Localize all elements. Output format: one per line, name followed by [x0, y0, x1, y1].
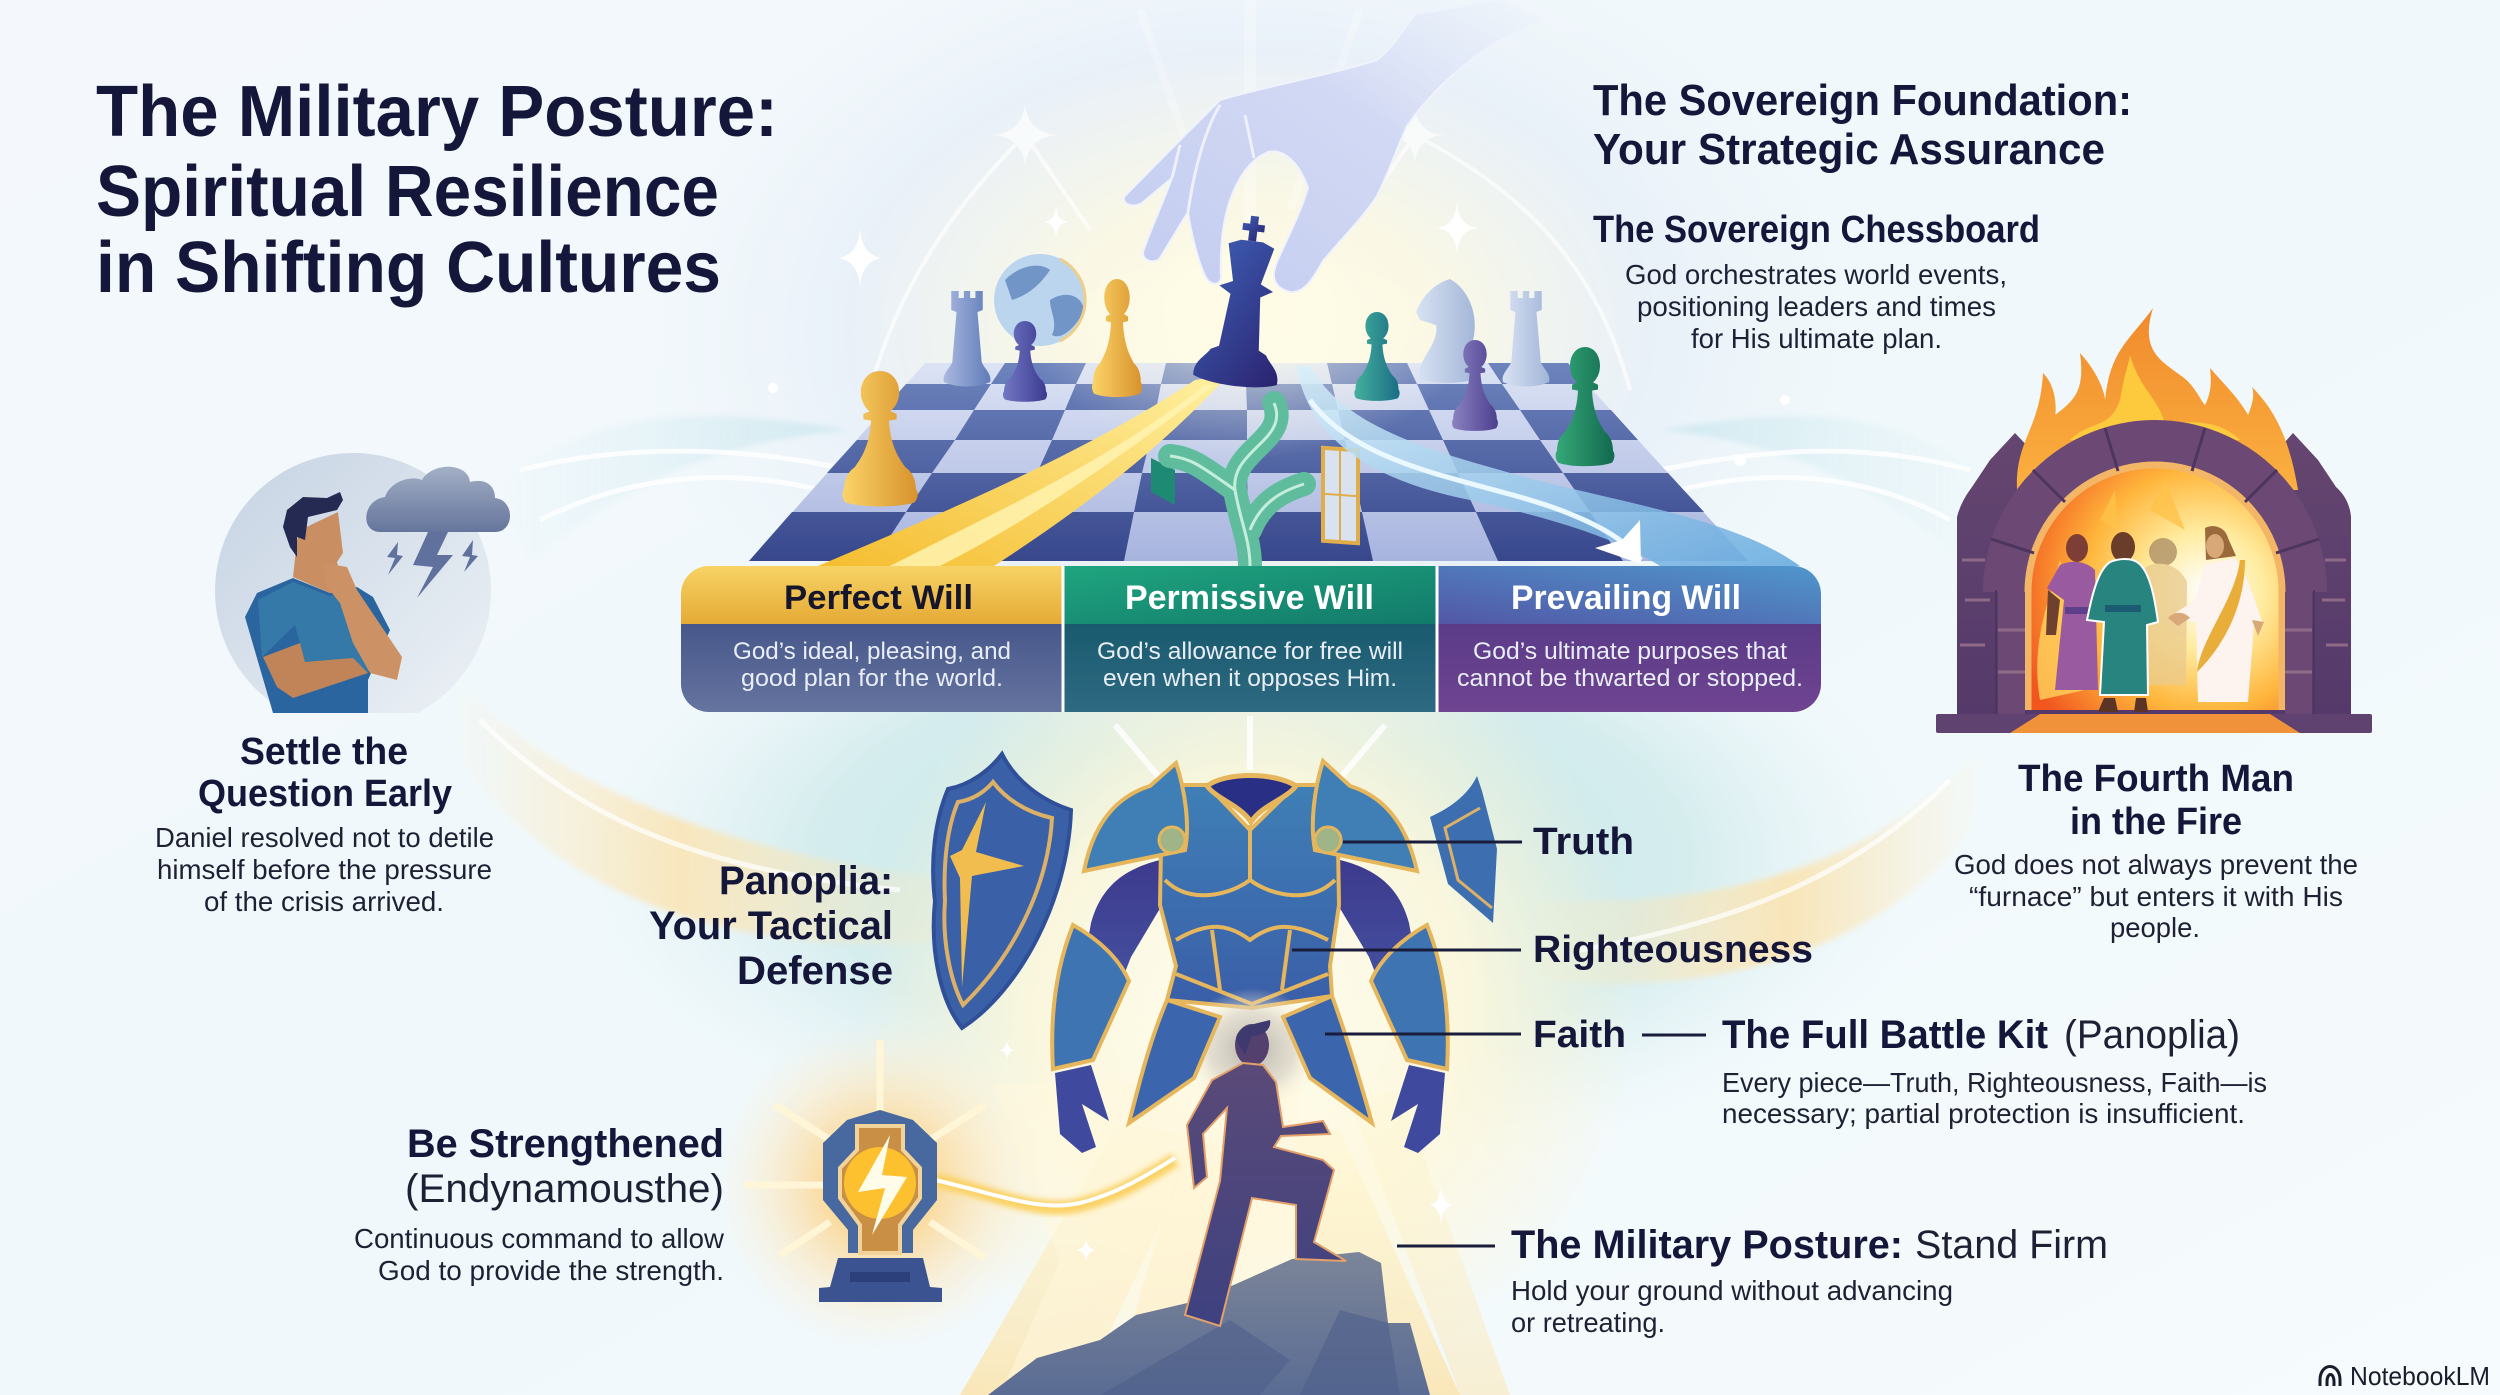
- armor: right bracer: [1371, 925, 1448, 1069]
- title: The Military Posture:: [96, 72, 778, 152]
- armor: glow behind the man: [1182, 988, 1322, 1112]
- armor: breastplate and arms: [1052, 761, 1448, 1153]
- text block: be strengthened: [354, 1122, 725, 1286]
- heading: sovereign foundation: [1593, 76, 2132, 174]
- text block: military posture stand firm: The Military Posture:: [1511, 1223, 1903, 1267]
- icon: rock outcrop: [988, 1252, 1430, 1395]
- cell: prevailing will: cannot be thwarted or stopped.: [1457, 665, 1803, 692]
- text block: full battle kit: The Full Battle Kit: [1722, 1013, 2048, 1057]
- piece: purple pawn: [1003, 321, 1047, 402]
- armor: right tasset: [1283, 996, 1372, 1123]
- title: [96, 72, 778, 308]
- label: faith with leader: Faith: [1533, 1014, 1626, 1056]
- chessboard: [749, 250, 1748, 561]
- text block: settle the question early: [155, 731, 494, 917]
- cell: permissive will: God’s allowance for free will: [1097, 638, 1403, 665]
- figure: radiant fourth man: [2168, 526, 2264, 702]
- cell: permissive will: [1097, 579, 1403, 692]
- text block: sovereign chessboard: for His ultimate plan.: [1691, 323, 1942, 354]
- piece: left rook: [944, 291, 990, 386]
- text block: the fourth man: [1954, 758, 2358, 943]
- icon: standing man silhouette: [1185, 1020, 1346, 1326]
- icon: globe: [994, 254, 1086, 346]
- text block: full battle kit: [1722, 1013, 2267, 1129]
- text block: military posture stand firm: Hold your ground without advancing: [1511, 1275, 1953, 1306]
- armor: left arm: [1087, 860, 1165, 985]
- path: permissive will branching road with doors: [1151, 403, 1358, 566]
- text block: military posture stand firm: [1397, 1223, 2108, 1338]
- text block: settle the question early: himself before the pressure: [157, 854, 492, 885]
- piece: king: [1192, 211, 1297, 391]
- armor: right pauldron: [1313, 761, 1417, 871]
- halo rays and arcs behind the board: [870, 0, 1630, 390]
- armor: right arm: [1335, 860, 1413, 985]
- path: prevailing will blue stream with arrow: [1296, 366, 1800, 566]
- cell: perfect will: [733, 579, 1011, 692]
- icon: left shield: [933, 754, 1071, 1028]
- heading: sovereign foundation: The Sovereign Foundation:: [1593, 76, 2132, 125]
- icon: thinking man with storm cloud: [215, 453, 510, 729]
- text block: full battle kit: (Panoplia): [2064, 1013, 2240, 1057]
- armor: left gauntlet: [1055, 1065, 1109, 1153]
- armor: left pauldron: [1084, 763, 1187, 871]
- sparkles around the board: [768, 202, 1790, 466]
- watermark: notebooklm: NotebookLM: [2350, 1361, 2490, 1391]
- icon: right shield: [1430, 776, 1497, 923]
- cell: perfect will: good plan for the world.: [741, 665, 1003, 692]
- piece: green pawn: [1556, 347, 1614, 466]
- text block: sovereign chessboard: The Sovereign Chessboard: [1593, 209, 2040, 251]
- cell: permissive will: Permissive Will: [1125, 579, 1374, 617]
- path: perfect will golden road: [818, 375, 1228, 566]
- piece: front gold pawn: [842, 371, 918, 506]
- piece: teal pawn: [1354, 312, 1400, 401]
- table: three wills: [681, 566, 1821, 712]
- piece: right rook: [1503, 291, 1549, 386]
- text block: be strengthened: (Endynamousthe): [405, 1167, 724, 1211]
- text block: be strengthened: God to provide the strength.: [378, 1255, 724, 1286]
- text block: the fourth man: in the Fire: [2070, 801, 2242, 843]
- label: righteousness with leader: Righteousness: [1533, 929, 1813, 971]
- text block: sovereign chessboard: God orchestrates world events,: [1625, 259, 2007, 290]
- text block: sovereign chessboard: positioning leaders and times: [1637, 291, 1996, 322]
- cell: prevailing will: Prevailing Will: [1511, 579, 1741, 617]
- heading: sovereign foundation: Your Strategic Assurance: [1593, 125, 2105, 174]
- text block: the fourth man: “furnace” but enters it with His: [1969, 881, 2343, 912]
- armor: torso: [1160, 785, 1339, 1008]
- figure: purple robed man: [2046, 534, 2098, 690]
- wisps: curving light streams left and right: [450, 416, 2000, 984]
- text block: military posture stand firm: or retreating.: [1511, 1307, 1665, 1338]
- label: truth with leader: Truth: [1533, 821, 1634, 863]
- text block: full battle kit: necessary; partial protection is insufficient.: [1722, 1098, 2245, 1129]
- text block: be strengthened: Be Strengthened: [407, 1122, 724, 1166]
- text block: settle the question early: of the crisis arrived.: [204, 886, 444, 917]
- piece: knight: [1416, 279, 1477, 383]
- icon: fiery furnace with four figures: [1936, 308, 2372, 733]
- icon: glowing power shield: [715, 1020, 1175, 1350]
- text block: the fourth man: God does not always prevent the: [1954, 849, 2358, 880]
- text block: panoplia: Panoplia:: [719, 859, 893, 903]
- text block: settle the question early: Question Early: [198, 773, 452, 815]
- piece: gold bishop: [1092, 279, 1142, 397]
- text block: military posture stand firm: Stand Firm: [1915, 1223, 2108, 1267]
- text block: full battle kit: Every piece—Truth, Righteousness, Faith—is: [1722, 1067, 2267, 1098]
- text block: panoplia: [649, 859, 893, 993]
- armor: left tasset: [1129, 1000, 1220, 1123]
- text block: settle the question early: Daniel resolved not to detile: [155, 822, 494, 853]
- cell: permissive will: even when it opposes Him.: [1103, 665, 1397, 692]
- text block: the fourth man: The Fourth Man: [2018, 758, 2294, 800]
- icon: divine hand lowering the king: [1124, 0, 1545, 292]
- cell: prevailing will: [1457, 579, 1803, 692]
- armor: left bracer: [1052, 925, 1129, 1069]
- text block: the fourth man: people.: [2110, 912, 2200, 943]
- cell: prevailing will: God’s ultimate purposes that: [1473, 638, 1787, 665]
- figure: teal robed man: [2087, 532, 2158, 712]
- cell: perfect will: God’s ideal, pleasing, and: [733, 638, 1011, 665]
- armor: right gauntlet: [1391, 1065, 1445, 1153]
- text block: settle the question early: Settle the: [240, 731, 408, 773]
- figure: ghost third man: [2145, 538, 2187, 685]
- chess pieces: [842, 211, 1614, 506]
- text block: panoplia: Your Tactical: [649, 904, 893, 948]
- sparkles around armor: [999, 1040, 1453, 1262]
- title: Spiritual Resilience: [96, 152, 719, 232]
- text block: sovereign chessboard: [1593, 209, 2040, 354]
- piece: right purple pawn: [1452, 340, 1498, 431]
- text block: panoplia: Defense: [737, 949, 893, 993]
- armor rays: [1115, 716, 1385, 790]
- cell: perfect will: Perfect Will: [784, 579, 973, 617]
- title: in Shifting Cultures: [96, 228, 721, 308]
- text block: be strengthened: Continuous command to allow: [354, 1223, 725, 1254]
